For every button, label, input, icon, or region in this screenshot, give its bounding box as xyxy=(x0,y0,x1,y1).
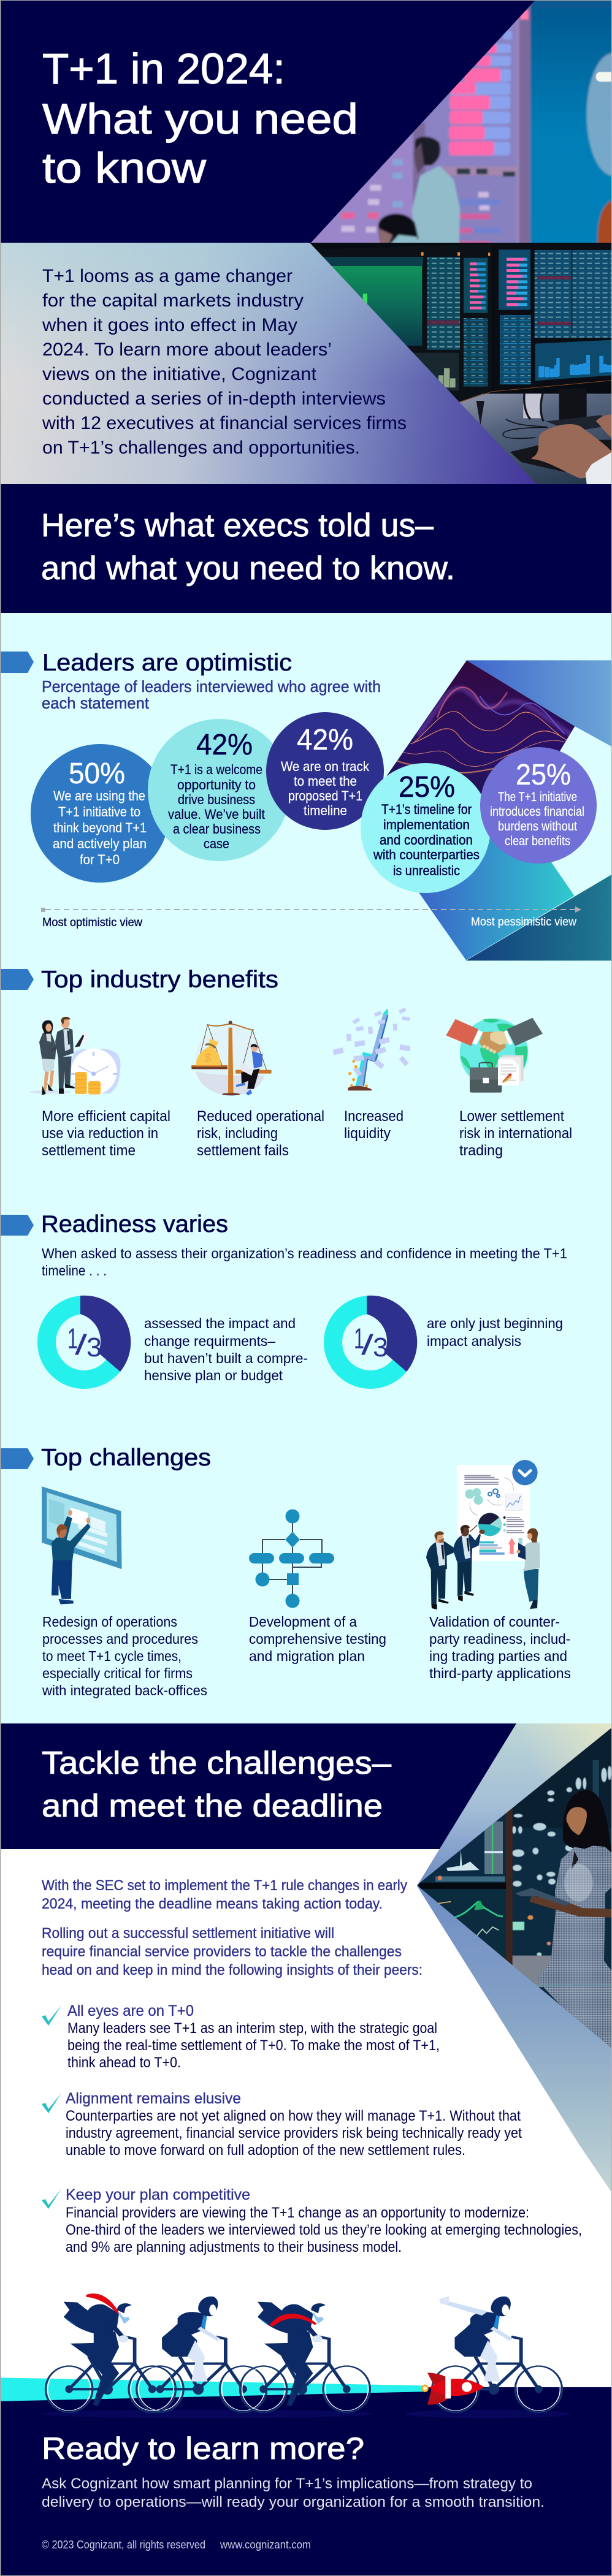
bubble: 50%: 50% xyxy=(69,758,125,790)
heading: tackle the challenges: and meet the deadline xyxy=(42,1788,383,1824)
heading: here's what execs told us xyxy=(41,507,455,587)
benefit text: reduced operational risk: risk, including xyxy=(197,1125,278,1142)
bubble: 25% financial burdens: clear benefits xyxy=(505,834,570,848)
decorative gradient strip xyxy=(417,1723,612,2193)
icon: handshake over globe with briefcase xyxy=(446,1018,543,1093)
bubble: 42% welcome opportunity xyxy=(148,719,290,861)
text: assessed the impact: change requirments– xyxy=(144,1333,276,1349)
insight: keep your plan competitive: and 9% are planning adjustments to their business model. xyxy=(66,2239,402,2255)
footer: copyright and website: www.cognizant.com xyxy=(220,2539,311,2551)
footer: copyright and website: © 2023 Cognizant, all rights reserved xyxy=(42,2539,205,2551)
bubble: 25% unrealistic timeline xyxy=(361,763,491,893)
heading: tackle the challenges: Tackle the challenges– xyxy=(42,1746,391,1781)
panel: execs banner xyxy=(0,484,612,613)
lead paragraph: 2024, meeting the deadline means taking action today. xyxy=(42,1896,383,1912)
call to action text: delivery to operations—will ready your organization for a smooth transition. xyxy=(42,2494,545,2510)
benefit text: efficient capital use: settlement time xyxy=(42,1142,136,1159)
panel: hero xyxy=(0,0,612,484)
benefit text: lower settlement risk xyxy=(459,1108,572,1159)
call to action text: Ask Cognizant how smart planning for T+1’s implications—from strategy to xyxy=(42,2475,532,2492)
bubble: 25% unrealistic timeline: with counterparties xyxy=(373,847,480,862)
photo: trading monitors and hands on keyboard xyxy=(307,243,612,484)
benefit text: reduced operational risk xyxy=(197,1108,324,1159)
benefit text: increased liquidity: liquidity xyxy=(344,1125,391,1142)
bubble: 42% welcome opportunity: T+1 is a welcome xyxy=(170,762,262,777)
icon: balance scale: $ xyxy=(204,1052,212,1065)
heading: leaders are optimistic: Leaders are optimistic xyxy=(42,650,292,676)
challenge text: counterparty readiness: third-party applications xyxy=(429,1665,571,1681)
insight: all eyes on T+0: Many leaders see T+1 as an interim step, with the strategic goal xyxy=(67,2020,437,2037)
bubble: 42% welcome opportunity: 42% xyxy=(196,729,253,761)
decorative photo shapes xyxy=(380,656,612,960)
panel: top challenges xyxy=(0,1445,571,1698)
insight: all eyes on T+0: think ahead to T+0. xyxy=(67,2054,181,2071)
lead paragraph: head on and keep in mind the following insights of their peers: xyxy=(42,1962,423,1978)
challenge text: testing and migration plan xyxy=(249,1614,386,1664)
panel: ready to learn more xyxy=(0,2293,612,2576)
label: most optimistic view: Most optimistic view xyxy=(42,916,142,929)
donut: one third assessed xyxy=(47,1296,131,1380)
benefit text: increased liquidity xyxy=(344,1108,404,1142)
intro sentence: timeline . . . xyxy=(42,1263,107,1279)
section marker xyxy=(0,1215,34,1236)
insight: alignment remains elusive xyxy=(42,2090,522,2159)
bubble: 25% unrealistic timeline: T+1’s timeline for xyxy=(381,802,472,817)
benefit text: lower settlement risk: trading xyxy=(459,1142,503,1159)
subheading: Percentage of leaders interviewed who agree with xyxy=(42,677,381,696)
text: assessed the impact xyxy=(144,1315,308,1383)
bubble: 42% on track: to meet the xyxy=(294,773,357,789)
icon: flowchart xyxy=(249,1509,334,1608)
donut: one third beginning: 3 xyxy=(373,1332,388,1362)
bubble: 42% on track: proposed T+1 xyxy=(288,788,362,804)
benefit text: efficient capital use: More efficient capital xyxy=(42,1108,170,1125)
text panel: intro: for the capital markets industry xyxy=(42,291,304,311)
bubble: 25% financial burdens: burdens without xyxy=(498,819,577,834)
icon: rising arrow with money xyxy=(332,1008,410,1090)
text panel: intro: with 12 executives at financial services firms xyxy=(42,413,407,433)
donut: one third assessed: 3 xyxy=(86,1332,102,1362)
scale arrow: optimistic to pessimistic xyxy=(41,906,581,913)
bubble: 50%: for T+0 xyxy=(80,852,120,867)
challenge text: redesign of operations: especially critical for firms xyxy=(42,1665,193,1681)
insight: alignment remains elusive: industry agreement, financial service providers risk being technically ready yet xyxy=(66,2125,522,2141)
insight: alignment remains elusive: Alignment remains elusive xyxy=(66,2090,241,2107)
insight: all eyes on T+0 xyxy=(42,2002,440,2071)
bubble: 42% welcome opportunity: drive business xyxy=(178,792,255,807)
footer: copyright and website xyxy=(42,2539,311,2551)
benefit text: efficient capital use: use via reduction in xyxy=(42,1125,158,1142)
bubble: 25% unrealistic timeline: implementation xyxy=(383,817,470,832)
title: T+1 in 2024: xyxy=(42,45,285,93)
heading: top challenges: Top challenges xyxy=(41,1445,211,1471)
challenge text: counterparty readiness: ing trading parties and xyxy=(429,1648,567,1664)
text panel: intro xyxy=(0,243,537,484)
challenge text: redesign of operations: Redesign of operations xyxy=(42,1614,177,1630)
text: just beginning impact analysis: are only just beginning xyxy=(427,1315,563,1331)
section marker xyxy=(0,969,34,990)
challenge text: redesign of operations: to meet T+1 cycle times, xyxy=(42,1648,182,1664)
heading: tackle the challenges xyxy=(42,1746,391,1824)
lead paragraph: Rolling out a successful settlement initiative will xyxy=(42,1925,334,1942)
intro sentence xyxy=(42,1245,567,1279)
challenge text: redesign of operations: with integrated back-offices xyxy=(42,1682,207,1698)
text: assessed the impact: hensive plan or budget xyxy=(144,1367,283,1383)
panel: top industry benefits xyxy=(0,967,572,1159)
lead paragraph: require financial service providers to tackle the challenges xyxy=(42,1943,402,1960)
donut: one third beginning xyxy=(333,1296,417,1380)
insight: keep your plan competitive: Financial providers are viewing the T+1 change as an opportunity to modernize: xyxy=(66,2205,529,2221)
icon: balance scale xyxy=(191,1020,272,1095)
text: assessed the impact: but haven’t built a compre- xyxy=(144,1350,308,1366)
subheading: each statement xyxy=(42,694,150,712)
bubble: 42% welcome opportunity: opportunity to xyxy=(177,777,256,792)
benefit text: reduced operational risk: settlement fails xyxy=(197,1142,289,1159)
challenge text: counterparty readiness: party readiness, includ- xyxy=(429,1631,570,1647)
icon: team reviewing counterparty report xyxy=(426,1460,540,1609)
insight: all eyes on T+0: being the real-time settlement of T+0. To make the most of T+1, xyxy=(67,2037,440,2054)
panel: tackle the challenges xyxy=(0,1722,612,2387)
challenge text: counterparty readiness xyxy=(429,1614,571,1681)
challenge text: redesign of operations xyxy=(42,1614,207,1698)
bubble: 50%: T+1 initiative to xyxy=(58,804,140,819)
bubble: 42% welcome opportunity: case xyxy=(204,836,229,851)
benefit text: reduced operational risk: Reduced operational xyxy=(197,1108,324,1125)
text panel: intro: when it goes into effect in May xyxy=(42,315,297,335)
benefit text: lower settlement risk: Lower settlement xyxy=(459,1108,564,1125)
bubble: 25% financial burdens xyxy=(480,747,597,864)
bubble: 25% financial burdens: 25% xyxy=(516,759,571,791)
bubble: 42% welcome opportunity: a clear business xyxy=(173,821,261,837)
bubble: 25% unrealistic timeline: and coordination xyxy=(380,832,473,848)
bubble: 42% welcome opportunity: value. We’ve built xyxy=(168,807,265,822)
bubble: 50%: We are using the xyxy=(53,788,145,804)
text panel: intro: 2024. To learn more about leaders’ xyxy=(42,340,332,360)
heading: readiness varies: Readiness varies xyxy=(41,1211,228,1237)
insight: all eyes on T+0: All eyes are on T+0 xyxy=(67,2002,194,2019)
illustration: cyclists and rocket xyxy=(0,2293,571,2418)
donut: one third beginning: / xyxy=(361,1329,373,1361)
text: just beginning impact analysis xyxy=(427,1315,563,1349)
donut: one third assessed: 1 xyxy=(67,1322,78,1354)
subheading xyxy=(42,677,381,712)
donut: one third assessed: / xyxy=(75,1329,87,1361)
insight: keep your plan competitive: Keep your plan competitive xyxy=(66,2186,250,2203)
label: most pessimistic view: Most pessimistic view xyxy=(471,916,576,929)
text panel: intro: views on the initiative, Cognizant xyxy=(42,364,317,384)
insight: alignment remains elusive: unable to move forward on full adoption of the new settlement rules. xyxy=(66,2142,465,2159)
heading: here's what execs told us: Here’s what execs told us– xyxy=(41,507,434,544)
title: to know xyxy=(42,144,206,192)
bubble: 42% on track xyxy=(266,712,384,830)
challenge text: testing and migration plan: Development of a xyxy=(249,1614,358,1630)
heading: ready to learn more: Ready to learn more? xyxy=(42,2431,364,2466)
text panel: intro: T+1 looms as a game changer xyxy=(42,266,293,286)
challenge text: redesign of operations: processes and procedures xyxy=(42,1631,198,1647)
challenge text: testing and migration plan: and migration plan xyxy=(249,1648,365,1664)
text panel: intro: on T+1’s challenges and opportunities. xyxy=(42,438,360,458)
heading: here's what execs told us: and what you need to know. xyxy=(41,550,455,587)
benefit text: lower settlement risk: risk in international xyxy=(459,1125,572,1142)
intro sentence: When asked to assess their organization’s readiness and confidence in meeting the T+1 xyxy=(42,1245,567,1261)
icon: person at process board xyxy=(42,1486,122,1605)
bubble: 25% unrealistic timeline: is unrealistic xyxy=(393,863,460,878)
text: just beginning impact analysis: impact analysis xyxy=(427,1333,521,1349)
panel: readiness varies xyxy=(0,1211,567,1383)
donut: one third beginning: 1 xyxy=(354,1322,364,1354)
call to action text xyxy=(42,2475,545,2510)
bubble: 50%: think beyond T+1 xyxy=(53,820,147,835)
bubble: 25% financial burdens: introduces financial xyxy=(490,805,584,819)
photo: woman with tablet at night skyline xyxy=(411,1722,612,2060)
insight: keep your plan competitive xyxy=(42,2186,582,2255)
bubble: 25% financial burdens: The T+1 initiative xyxy=(498,790,577,804)
panel: leaders are optimistic xyxy=(0,650,612,960)
benefit text: increased liquidity: Increased xyxy=(344,1108,404,1125)
bubble: 25% unrealistic timeline: 25% xyxy=(399,771,455,804)
bubble: 42% on track: We are on track xyxy=(281,759,370,774)
title: What you need xyxy=(42,95,358,143)
bubble: 50%: and actively plan xyxy=(53,836,147,851)
challenge text: testing and migration plan: comprehensive testing xyxy=(249,1631,386,1647)
text panel: intro: conducted a series of in-depth interviews xyxy=(42,389,386,409)
icon: business people and clock xyxy=(29,1017,120,1095)
challenge text: counterparty readiness: Validation of counter- xyxy=(429,1614,560,1630)
title xyxy=(42,45,358,192)
insight: alignment remains elusive: Counterparties are not yet aligned on how they will manage T+1. Without that xyxy=(66,2108,521,2124)
text: assessed the impact: assessed the impact and xyxy=(144,1315,296,1331)
heading: top industry benefits: Top industry benefits xyxy=(41,967,278,993)
benefit text: efficient capital use xyxy=(42,1108,170,1159)
lead paragraph xyxy=(42,1877,423,1978)
photo: trading floor wall screens xyxy=(307,0,612,247)
lead paragraph: With the SEC set to implement the T+1 rule changes in early xyxy=(42,1877,407,1894)
section marker xyxy=(0,1448,34,1469)
bubble: 42% on track: timeline xyxy=(304,803,347,818)
bubble: 42% on track: 42% xyxy=(297,724,353,756)
section marker xyxy=(0,652,34,673)
bubble: 50% xyxy=(31,744,169,883)
